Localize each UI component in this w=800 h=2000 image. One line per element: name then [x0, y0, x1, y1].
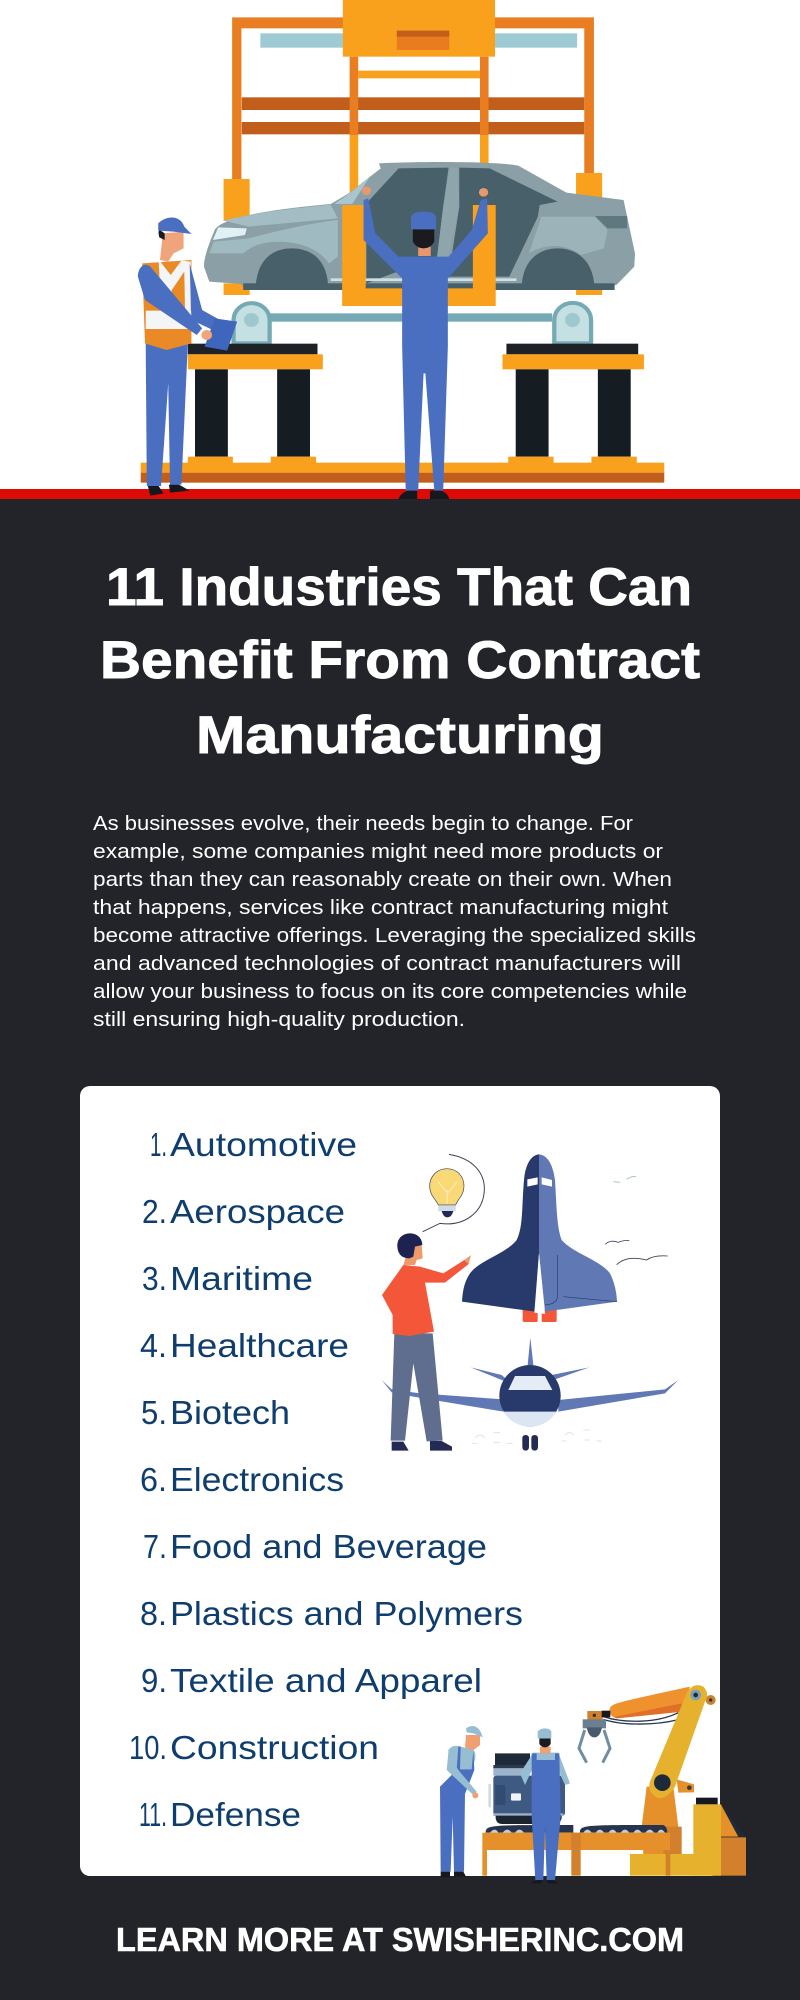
industries list: Textile and Apparel: [170, 1662, 482, 1699]
industries list: Defense: [170, 1796, 301, 1833]
industries list: Healthcare: [170, 1327, 349, 1364]
industries list: Aerospace: [170, 1193, 345, 1230]
industries list: Biotech: [170, 1394, 290, 1431]
industries list: 10.: [129, 1729, 167, 1766]
intro paragraph: allow your business to focus on its core competencies while: [93, 980, 687, 1003]
car body: [204, 162, 635, 290]
icon: space shuttle: [462, 1154, 617, 1322]
industries list: Automotive: [170, 1126, 357, 1163]
industries list: 3.: [142, 1260, 167, 1297]
illustration: car assembly lift with two workers: [138, 0, 664, 499]
lift frame: [224, 0, 602, 295]
intro paragraph: become attractive offerings. Leveraging the specialized skills: [93, 924, 696, 947]
intro paragraph: parts than they can reasonably create on their own. When: [93, 868, 672, 891]
icon: light bulb in thought bubble: [423, 1154, 484, 1232]
engine on conveyor: [488, 1753, 565, 1824]
title: [100, 558, 700, 765]
industries list: 6.: [140, 1461, 167, 1498]
title: Benefit From Contract: [100, 631, 700, 690]
yellow machine blocks: [630, 1798, 746, 1876]
red divider bar: [0, 489, 800, 499]
panel: header illustration background: [0, 0, 800, 490]
industries list: Plastics and Polymers: [170, 1595, 523, 1632]
industries list: Electronics: [170, 1461, 344, 1498]
industries list: Food and Beverage: [170, 1528, 487, 1565]
industries list: Maritime: [170, 1260, 313, 1297]
icon: airplane: [382, 1338, 678, 1451]
industries list: Construction: [170, 1729, 379, 1766]
call to action footer: LEARN MORE AT SWISHERINC.COM: [116, 1921, 684, 1958]
worker in overalls, right: [520, 1728, 570, 1883]
intro paragraph: As businesses evolve, their needs begin to change. For: [93, 812, 633, 835]
industries list: 2.: [142, 1193, 167, 1230]
birds: [605, 1177, 668, 1265]
pivots and rail: [234, 303, 591, 343]
industries list: 8.: [140, 1595, 167, 1632]
industries list: 7.: [143, 1528, 167, 1565]
person pointing: [382, 1233, 471, 1451]
worker with raised arms: [362, 186, 488, 499]
illustration: person with shuttle and airplane: [382, 1154, 678, 1451]
title: Manufacturing: [196, 706, 604, 765]
industries list: 5.: [141, 1394, 167, 1431]
industries list: 11.: [139, 1796, 167, 1833]
worker in overalls, left: [440, 1726, 483, 1877]
work tables and base: [141, 344, 664, 483]
lift cradle: [342, 205, 496, 306]
panel: industries list card: [80, 1086, 720, 1876]
intro paragraph: that happens, services like contract manufacturing might: [93, 896, 668, 919]
intro paragraph: [93, 812, 696, 1031]
industries list: 9.: [141, 1662, 167, 1699]
industries list: 4.: [140, 1327, 167, 1364]
intro paragraph: still ensuring high-quality production.: [93, 1008, 465, 1031]
industries list: 1.: [150, 1126, 167, 1163]
intro paragraph: and advanced technologies of contract manufacturers will: [93, 952, 681, 975]
worker with clipboard: [138, 217, 237, 496]
intro paragraph: example, some companies might need more products or: [93, 840, 663, 863]
illustration: engine assembly line with robot arm and workers: [440, 1685, 746, 1883]
title: 11 Industries That Can: [106, 558, 692, 617]
conveyor table: [482, 1825, 670, 1876]
robot arm: [579, 1685, 716, 1854]
industries list: [129, 1126, 523, 1833]
